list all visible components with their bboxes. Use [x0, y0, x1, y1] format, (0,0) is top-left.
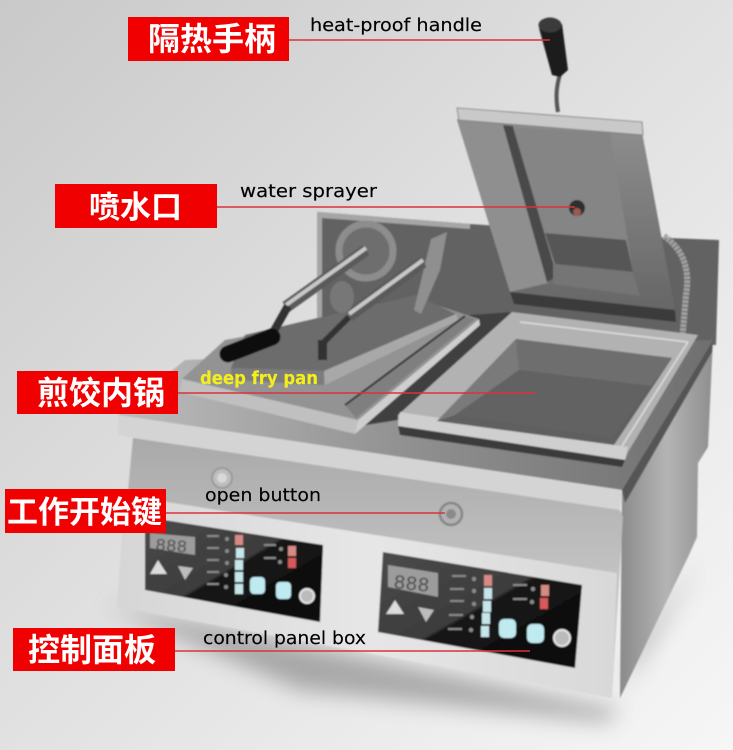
- left control panel: 888: [155, 537, 188, 558]
- right control panel: 888: [392, 572, 430, 599]
- callout: control panel box: control panel box: [203, 628, 366, 649]
- worktop surface: [118, 340, 713, 490]
- fry pan frame: [398, 312, 698, 467]
- callout: open button: 工作开始键: [7, 495, 162, 530]
- callout: control panel box: [13, 628, 530, 671]
- control fascia: [117, 490, 617, 698]
- callout: water sprayer: 喷水口: [89, 190, 182, 225]
- callout: open button: [5, 485, 445, 533]
- callout: water sprayer: water sprayer: [240, 181, 378, 202]
- flexible hose: [664, 236, 687, 342]
- right side of body: [620, 340, 713, 698]
- press arm and rods: [228, 224, 447, 360]
- left control panel: [145, 517, 323, 622]
- callout: water sprayer: [55, 181, 575, 228]
- worktop front edge: [118, 415, 622, 510]
- left start button: [212, 468, 232, 488]
- callout: deep fry pan: deep fry pan: [200, 368, 318, 389]
- fryer machine: [117, 18, 719, 698]
- right control panel: [378, 552, 582, 668]
- floor shadow: [105, 560, 700, 722]
- callout: deep fry pan: [17, 368, 535, 414]
- water sprayer nozzle: [569, 200, 585, 216]
- gap between griddle and fry pan: [360, 312, 512, 426]
- back splash panel: [317, 212, 719, 345]
- griddle pan plate: [180, 295, 480, 434]
- callout: deep fry pan: 煎饺内锅: [37, 375, 165, 411]
- callout: heat-proof handle: heat-proof handle: [310, 15, 482, 36]
- open lid: [457, 108, 676, 322]
- front of body: [117, 438, 623, 698]
- callout: heat-proof handle: [128, 15, 550, 61]
- black grip: [228, 337, 272, 354]
- callout: open button: open button: [205, 485, 321, 506]
- callout: heat-proof handle: 隔热手柄: [148, 21, 276, 57]
- right start button: [440, 503, 462, 525]
- callout: control panel box: 控制面板: [28, 632, 156, 668]
- insulated handle: [538, 18, 568, 112]
